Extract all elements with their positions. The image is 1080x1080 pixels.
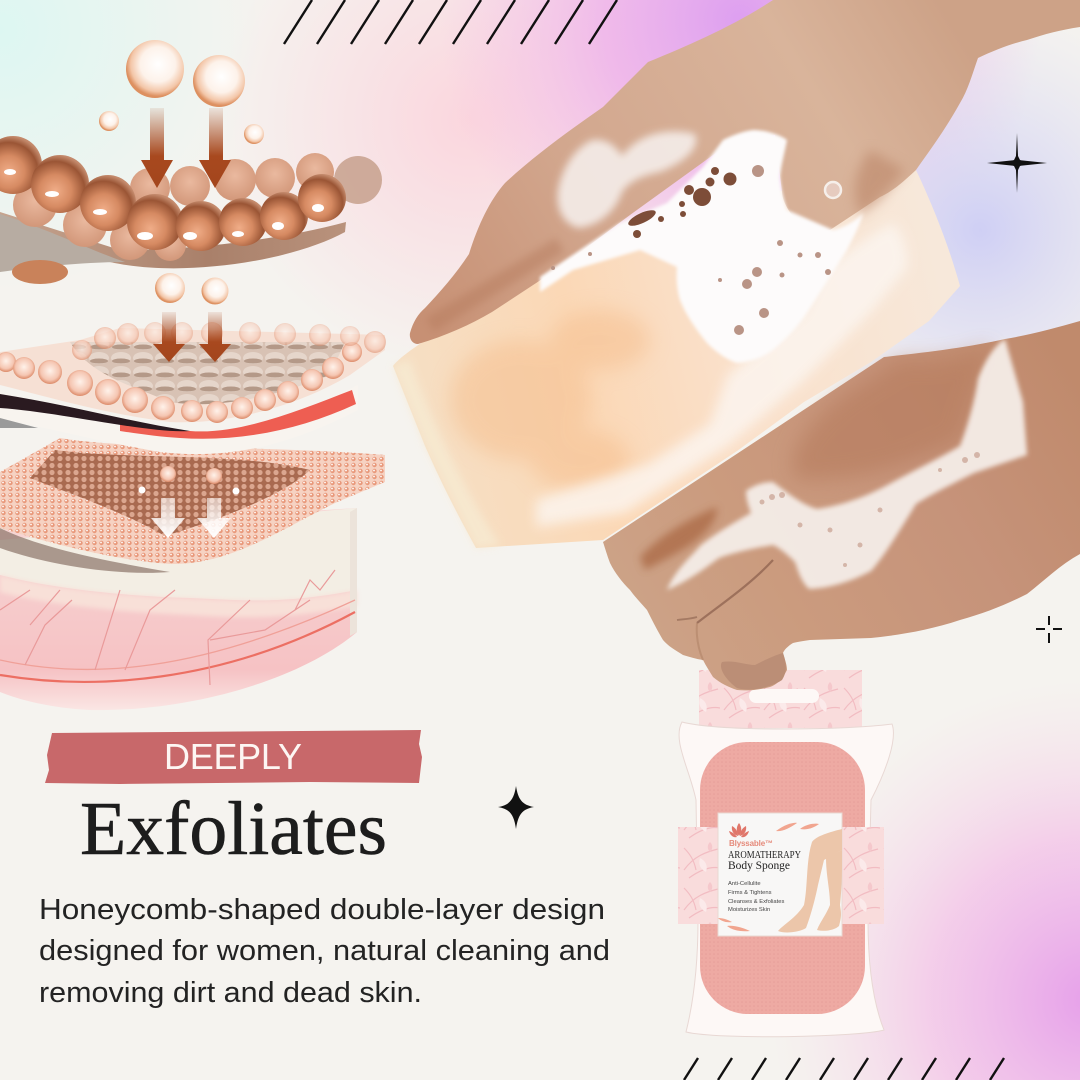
decorative slashes: top (284, 0, 617, 44)
floral band (678, 827, 884, 924)
product package (678, 670, 893, 1037)
product subname: Body Sponge (728, 860, 790, 872)
layer 2: bubbles (155, 273, 228, 304)
upper hand (410, 0, 1080, 344)
icon: dashed cross sparkle (1036, 616, 1062, 643)
heading: Exfoliates (80, 787, 387, 871)
layer 2: scale sheet (0, 328, 385, 422)
features list: Firms & Tightens (728, 890, 772, 896)
layer 3: skin block (0, 508, 357, 710)
layer 1: support sheet (0, 212, 346, 284)
body text: designed for women, natural cleaning and (39, 935, 610, 967)
layer 3: mesh sheet (0, 438, 385, 573)
arrows: layer 1 (141, 108, 231, 188)
foam on sponge top (540, 130, 863, 363)
arrows: layer 2 (153, 312, 231, 362)
foam on thumb (558, 132, 841, 228)
features list: Moisturizes Skin (728, 907, 770, 913)
layer 2: edge beads (0, 322, 386, 423)
brand: Blyssable™ (729, 839, 773, 848)
back card (699, 670, 862, 728)
body text: removing dirt and dead skin. (39, 977, 422, 1009)
features list: Cleanses & Exfoliates (728, 899, 784, 905)
lower hand and forearm (603, 321, 1080, 690)
clear pouch (679, 722, 893, 1037)
lotus logo (729, 823, 749, 837)
features list (728, 881, 784, 913)
sponge right side and lower foam (536, 223, 907, 527)
decorative slashes: bottom (684, 1058, 1004, 1080)
foam on forearm (667, 339, 1027, 590)
icon: solid sparkle centre (498, 786, 534, 829)
body text: Honeycomb-shaped double-layer design (39, 894, 605, 926)
product name: AROMATHERAPY (728, 850, 801, 861)
layer 1: bubbles (99, 40, 264, 144)
layer 1: beads (0, 136, 382, 261)
layer 2: under sheet (0, 385, 358, 454)
skin layers diagram (0, 40, 386, 710)
banner text: DEEPLY (164, 736, 302, 777)
arrows: white (151, 498, 231, 538)
legs illustration (778, 829, 842, 932)
pink sponge in pouch (700, 742, 865, 1014)
layer 3: bubbles (138, 466, 240, 494)
icon: thin sparkle top right (987, 133, 1047, 193)
product label (718, 813, 842, 936)
body text (39, 894, 610, 1009)
petals (718, 823, 819, 931)
hang hole (749, 689, 819, 703)
sponge (393, 170, 960, 548)
features list: Anti-Cellulite (728, 881, 761, 887)
tape banner (45, 730, 422, 784)
